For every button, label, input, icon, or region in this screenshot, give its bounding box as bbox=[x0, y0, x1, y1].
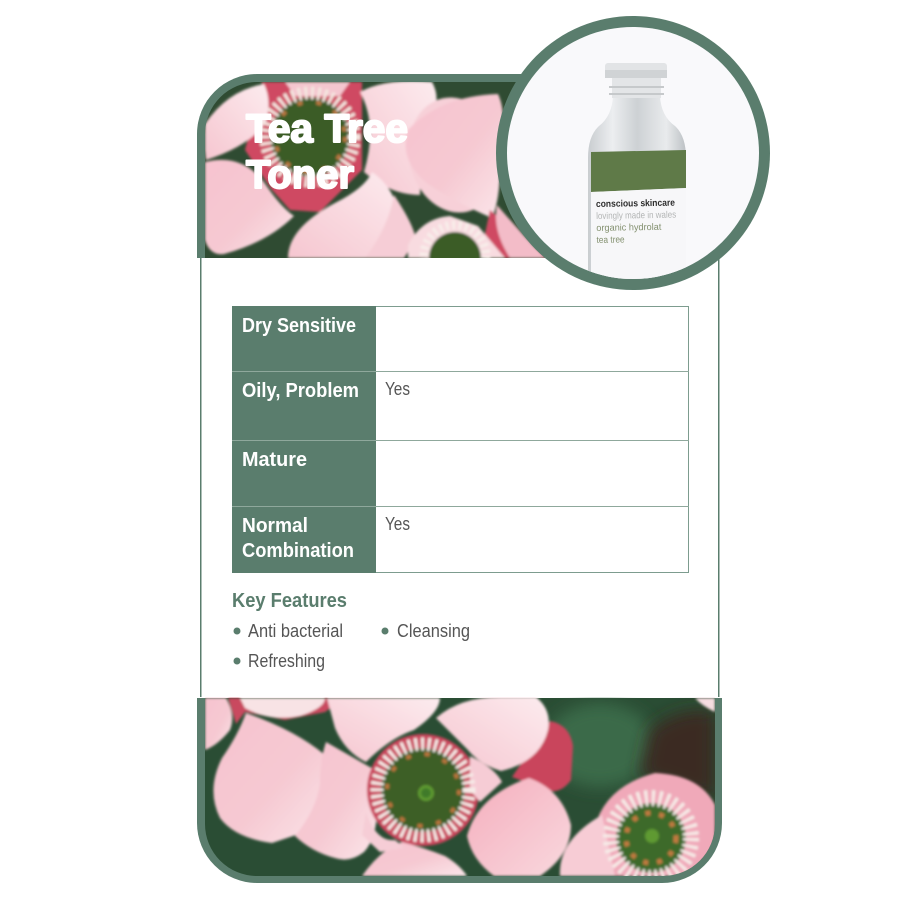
infographic: tea tree toner card bbox=[197, 16, 770, 883]
row: normal combination: Normal bbox=[242, 515, 308, 537]
value: oily problem: Yes bbox=[385, 379, 410, 399]
key features list bbox=[234, 621, 470, 671]
skin type table bbox=[232, 306, 689, 573]
value: normal combination: Yes bbox=[385, 514, 410, 534]
row: normal combination: Combination bbox=[242, 540, 354, 562]
card title bbox=[246, 107, 408, 197]
key features heading: Key Features bbox=[232, 590, 347, 612]
card body bbox=[200, 258, 720, 697]
card title: Toner bbox=[246, 153, 354, 197]
photo: bottom tea tree flowers bbox=[205, 697, 715, 878]
product bottle: conscious skincare bbox=[596, 198, 675, 210]
card frame bottom bbox=[197, 698, 722, 883]
key features list: Anti bacterial bbox=[248, 621, 343, 641]
product bottle: organic hydrolat bbox=[596, 222, 662, 234]
product circle bbox=[496, 16, 770, 290]
row: normal combination bbox=[242, 515, 354, 562]
product bottle: lovingly made in wales bbox=[596, 210, 676, 222]
product bottle bbox=[588, 63, 686, 290]
row: oily problem: Oily, Problem bbox=[242, 380, 359, 402]
row: mature: Mature bbox=[242, 449, 307, 471]
card title: Tea Tree bbox=[246, 107, 408, 151]
key features list: Refreshing bbox=[248, 651, 325, 671]
row: dry sensitive: Dry Sensitive bbox=[242, 315, 356, 337]
card frame top bbox=[197, 74, 662, 258]
photo: top tea tree flowers bbox=[205, 82, 545, 258]
key features list: Cleansing bbox=[397, 621, 470, 641]
product bottle: tea tree bbox=[596, 235, 625, 246]
